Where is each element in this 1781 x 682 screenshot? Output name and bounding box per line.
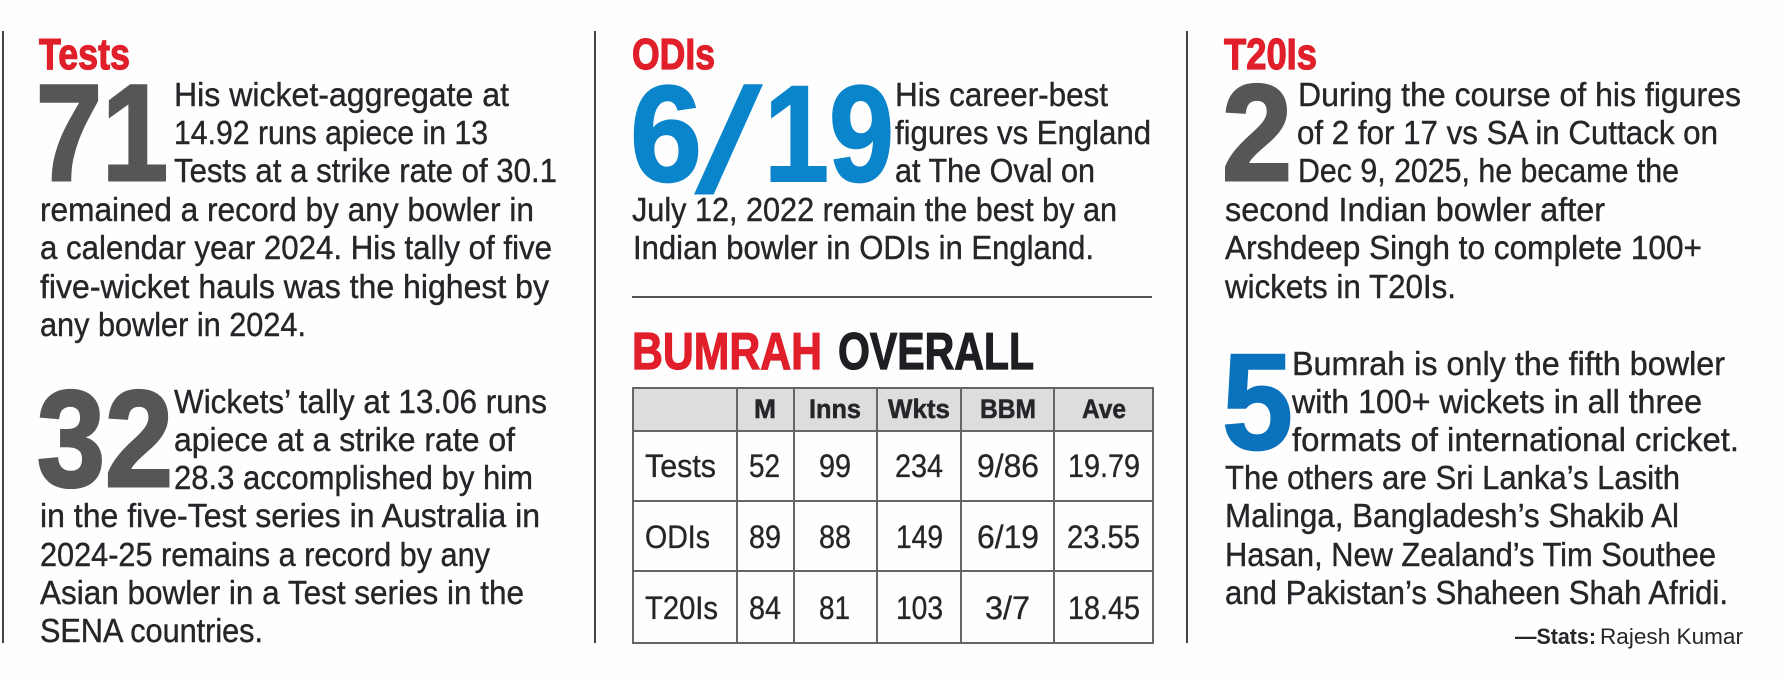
- panel: ODIs: [630, 30, 1153, 643]
- table row: Tests: 19.79: [1068, 448, 1140, 484]
- text block: 2 for 17 note: Arshdeep Singh to complete 100+: [1225, 229, 1702, 266]
- table row: Tests: 52: [749, 448, 780, 484]
- heading: ODIs: ODIs: [632, 30, 715, 79]
- table row: T20Is: 18.45: [1068, 590, 1140, 626]
- text block: 71 wickets: any bowler in 2024.: [40, 306, 306, 343]
- big number: 2: 2: [1222, 57, 1292, 210]
- text block: 71 wickets: 14.92 runs apiece in 13: [174, 114, 488, 151]
- table row: Tests: 234: [895, 448, 943, 484]
- table row: ODIs: 88: [819, 519, 851, 555]
- credit line: —Stats:: [1515, 624, 1596, 649]
- heading: Tests: Tests: [39, 30, 130, 79]
- big number: 6/19: 19: [764, 58, 894, 211]
- text block: 6/19 note: [632, 76, 1151, 266]
- text block: 100+ wickets note: Hasan, New Zealand’s Tim Southee: [1225, 536, 1716, 573]
- text block: 71 wickets: His wicket-aggregate at: [174, 76, 509, 113]
- table row: ODIs: 149: [896, 519, 943, 555]
- text block: 100+ wickets note: Bumrah is only the fifth bowler: [1292, 345, 1725, 382]
- big number: 5: 5: [1222, 326, 1293, 479]
- text block: 71 wickets: a calendar year 2024. His tally of five: [40, 229, 552, 266]
- text block: 2 for 17 note: second Indian bowler after: [1225, 191, 1605, 228]
- table header row: BBM: [980, 394, 1036, 424]
- text block: 32 wickets: 28.3 accomplished by him: [174, 459, 533, 496]
- heading: Bumrah Overall: OVERALL: [838, 323, 1034, 381]
- table row: ODIs: 6/19: [977, 519, 1039, 555]
- big number: 71: 71: [36, 57, 168, 210]
- text block: 32 wickets: Wickets’ tally at 13.06 runs: [174, 383, 547, 420]
- text block: 71 wickets: [40, 76, 557, 343]
- text block: 32 wickets: SENA countries.: [40, 612, 263, 649]
- table row: T20Is: 103: [896, 590, 943, 626]
- table row: ODIs: ODIs: [645, 519, 710, 555]
- big number: 6/19: 6: [630, 58, 702, 211]
- table row: T20Is: 81: [819, 590, 850, 626]
- text block: 100+ wickets note: with 100+ wickets in all three: [1291, 383, 1702, 420]
- text block: 6/19 note: figures vs England: [895, 114, 1151, 151]
- text block: 6/19 note: Indian bowler in ODIs in England.: [633, 229, 1094, 266]
- table row: Tests: Tests: [645, 448, 716, 484]
- text block: 2 for 17 note: During the course of his figures: [1298, 76, 1741, 113]
- table row: Tests: 99: [819, 448, 851, 484]
- text block: 100+ wickets note: Malinga, Bangladesh’s Shakib Al: [1225, 497, 1679, 534]
- text block: 6/19 note: at The Oval on: [895, 152, 1095, 189]
- panel: T20Is: [1222, 30, 1743, 649]
- big number: 32: 32: [37, 363, 173, 516]
- table header row: Inns: [809, 394, 861, 424]
- table row: Tests: [645, 448, 1140, 484]
- text block: 71 wickets: five-wicket hauls was the highest by: [40, 268, 549, 305]
- text block: 71 wickets: Tests at a strike rate of 30.1: [174, 152, 557, 189]
- text block: 32 wickets: [40, 383, 547, 649]
- text block: 100+ wickets note: [1225, 345, 1739, 611]
- text block: 32 wickets: in the five-Test series in Australia in: [40, 497, 540, 534]
- text block: 6/19 note: His career-best: [895, 76, 1108, 113]
- heading: T20Is: T20Is: [1224, 30, 1317, 79]
- heading: Bumrah Overall: BUMRAH: [632, 323, 822, 381]
- table header row: Wkts: [888, 394, 950, 424]
- text block: 2 for 17 note: wickets in T20Is.: [1224, 268, 1456, 305]
- panel: Tests: [36, 30, 557, 649]
- text block: 100+ wickets note: formats of international cricket.: [1292, 421, 1739, 458]
- big number: 6/19: /: [694, 57, 764, 225]
- text block: 2 for 17 note: of 2 for 17 vs SA in Cuttack on: [1297, 114, 1718, 151]
- credit line: [1515, 624, 1743, 649]
- table row: T20Is: T20Is: [645, 590, 718, 626]
- table row: ODIs: 89: [749, 519, 781, 555]
- table header row: M: [754, 394, 776, 424]
- table row: T20Is: [645, 590, 1140, 626]
- text block: 32 wickets: Asian bowler in a Test series in the: [40, 574, 524, 611]
- table row: T20Is: 84: [749, 590, 781, 626]
- table header row: Ave: [1082, 394, 1126, 424]
- text block: 32 wickets: 2024-25 remains a record by any: [40, 536, 490, 573]
- credit line: Rajesh Kumar: [1600, 624, 1743, 649]
- table row: ODIs: 23.55: [1067, 519, 1140, 555]
- text block: 100+ wickets note: and Pakistan’s Shaheen Shah Afridi.: [1225, 574, 1728, 611]
- text block: 71 wickets: remained a record by any bowler in: [40, 191, 534, 228]
- text block: 100+ wickets note: The others are Sri Lanka’s Lasith: [1225, 459, 1680, 496]
- text block: 2 for 17 note: [1224, 76, 1741, 305]
- table row: Tests: 9/86: [977, 448, 1039, 484]
- big number: 6/19: [630, 57, 894, 225]
- table row: T20Is: 3/7: [985, 590, 1030, 626]
- text block: 2 for 17 note: Dec 9, 2025, he became the: [1298, 152, 1679, 189]
- table row: ODIs: [645, 519, 1140, 555]
- heading: Bumrah Overall: [632, 323, 1034, 381]
- text block: 6/19 note: July 12, 2022 remain the best by an: [632, 191, 1117, 228]
- table: career stats: [633, 388, 1153, 643]
- table header row: [754, 394, 1126, 424]
- text block: 32 wickets: apiece at a strike rate of: [174, 421, 516, 458]
